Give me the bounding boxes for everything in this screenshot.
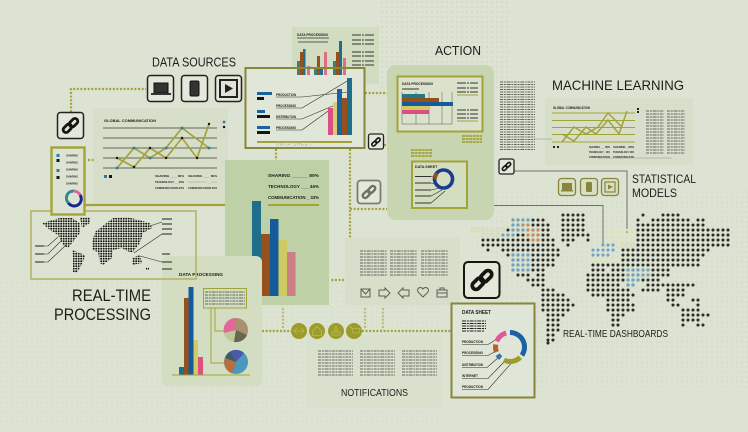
icon: left arrow	[398, 288, 409, 298]
bars	[172, 287, 250, 376]
world map: dots	[473, 215, 728, 343]
donut labels: PROCESSING	[462, 351, 483, 355]
icon: phone	[182, 76, 208, 102]
link icon: small centre	[368, 134, 384, 149]
link icon: top left	[58, 112, 84, 138]
donut labels: PRODUCTION	[462, 340, 484, 344]
legend bars	[257, 92, 272, 134]
sheet title: DATA SHEET	[462, 310, 491, 316]
chart legend: TECHNOLOGY __ 46%	[155, 180, 184, 184]
icons: olive circles	[291, 323, 362, 339]
icons: data sources	[148, 76, 242, 102]
heading: statistical models: STATISTICAL	[632, 172, 696, 186]
frame: main data sheet: DATA SHEET	[276, 142, 312, 148]
sheet intro	[462, 321, 486, 331]
chart values: COMMUNICATE	[613, 155, 634, 159]
orange dots	[523, 225, 538, 240]
legend markers: SHARING	[66, 182, 78, 186]
chart values: COMMUNICATION	[589, 155, 610, 159]
legend markers: SHARING	[66, 168, 78, 172]
chart values: SHARING ___ 80%	[589, 145, 610, 149]
connector: dotted lines	[71, 89, 457, 331]
chart values: TECHNOLOGY _ 46%	[589, 150, 610, 154]
legend markers	[56, 154, 78, 186]
labels: PRODUCTION	[276, 93, 297, 97]
donut labels: INTERNET	[462, 374, 478, 378]
pie chart: upper	[224, 318, 248, 342]
donut	[66, 191, 81, 206]
bar values	[268, 173, 319, 206]
frame: horizontal bar chart: DATA PROCESSING	[402, 82, 433, 86]
icon: house	[309, 323, 325, 339]
chart values: SHARING _ 80%	[613, 145, 634, 149]
footer	[257, 141, 352, 143]
chart title: GLOBAL COMMUNICATION	[553, 106, 590, 110]
panel: green bar chart	[225, 160, 329, 305]
chart legend: SHARING ____ 80%	[188, 174, 217, 178]
frame: horizontal bar chart	[398, 76, 482, 132]
note: action lower	[411, 150, 432, 156]
heading: data sources: DATA SOURCES	[152, 54, 236, 70]
icon: laptop	[148, 76, 174, 102]
labels: PROCESSING	[276, 104, 296, 108]
panel: text and icons	[345, 238, 460, 305]
heading: real-time dashboards: REAL-TIME DASHBOARDS	[563, 329, 668, 340]
icon: olive video	[602, 178, 618, 196]
panel: left world map	[31, 211, 196, 279]
icon: briefcase	[437, 288, 447, 297]
bars	[328, 78, 352, 135]
chart title: GLOBAL COMMUNICATION	[104, 118, 156, 123]
heading: action: ACTION	[435, 43, 481, 58]
icon: right arrow	[379, 288, 390, 298]
panel: left legend box	[52, 148, 84, 214]
note: action upper	[462, 136, 482, 142]
pie chart: lower	[224, 350, 248, 374]
heading: real-time processing	[54, 286, 151, 324]
chart title: DATA PROCESSING	[297, 33, 328, 37]
chart legend: COMMUNICATION 33%	[155, 186, 184, 190]
chart values: TECHNOLOGY 46%	[613, 150, 634, 154]
line chart	[552, 108, 639, 148]
legend markers: SHARING	[66, 160, 78, 164]
donut chart	[495, 332, 525, 361]
heading: real-time processing: PROCESSING	[54, 305, 151, 324]
labels	[276, 80, 349, 130]
donut labels	[462, 339, 514, 390]
blue dots	[503, 220, 648, 285]
heading: machine learning: MACHINE LEARNING	[552, 77, 684, 93]
heading: statistical models: MODELS	[632, 186, 677, 200]
line chart	[103, 122, 224, 168]
frame: main data sheet	[246, 68, 364, 148]
panel: global communication	[93, 108, 228, 205]
frame: donut sheet: DATA SHEET	[415, 165, 438, 169]
icon: video	[216, 76, 242, 102]
bar values: TECHNOLOGY ___ 46%	[268, 184, 319, 189]
chart legend: COMMUNICATION 33%	[188, 186, 217, 190]
icon: share	[291, 323, 307, 339]
note box	[204, 288, 246, 308]
donut labels: PRODUCTION	[462, 385, 484, 389]
bar values: COMMUNICATION _ 33%	[268, 195, 319, 200]
legend markers: SHARING	[66, 154, 78, 158]
dotted world map	[42, 217, 152, 273]
chart legend	[104, 174, 217, 190]
labels: PROCESSING	[276, 126, 296, 130]
legend markers: SHARING	[66, 174, 78, 178]
icon: olive laptop	[558, 178, 576, 196]
icons: olive data sources	[558, 178, 618, 196]
panel: machine learning	[535, 98, 693, 165]
chart legend: SHARING ____ 80%	[155, 174, 184, 178]
icon: hand	[328, 323, 344, 339]
connectors	[211, 308, 225, 363]
text rows	[352, 35, 374, 65]
link icon: large	[464, 262, 500, 298]
icon: cart	[346, 323, 362, 339]
connector: olive line	[85, 204, 225, 206]
donut labels: DISTRIBUTION	[462, 363, 484, 367]
link icon: grey	[358, 180, 380, 204]
pale dots	[473, 230, 633, 260]
panel: top chart	[292, 27, 379, 84]
chart legend: TECHNOLOGY __ 46%	[188, 180, 217, 184]
icon: olive phone	[580, 178, 598, 196]
panel: action	[387, 65, 494, 220]
map labels	[35, 219, 172, 269]
icon: envelope	[361, 289, 370, 297]
frame: data sheet	[452, 304, 534, 398]
labels: DISTRIBUTION	[276, 115, 297, 119]
panel: notifications	[306, 335, 443, 407]
heading: notifications: NOTIFICATIONS	[341, 388, 408, 399]
heading: real-time processing: REAL-TIME	[72, 286, 151, 305]
text columns	[646, 111, 685, 153]
frame: donut sheet	[412, 162, 467, 208]
text columns	[360, 251, 448, 275]
bars	[252, 201, 296, 296]
top chart bars	[294, 41, 352, 75]
icon: heart	[418, 288, 428, 297]
chart values	[589, 145, 634, 159]
link icon: machine learning	[499, 159, 514, 174]
dark dots	[473, 215, 728, 343]
text columns	[318, 351, 437, 375]
panel: data processing	[162, 256, 262, 386]
bar values: SHARING ______ 80%	[268, 173, 319, 178]
icon row	[361, 288, 447, 298]
chart title: DATA PROCESSING	[179, 272, 223, 277]
text block: machine learning left	[500, 82, 535, 150]
grey connector lines	[468, 171, 627, 245]
heading: statistical models	[632, 172, 696, 200]
